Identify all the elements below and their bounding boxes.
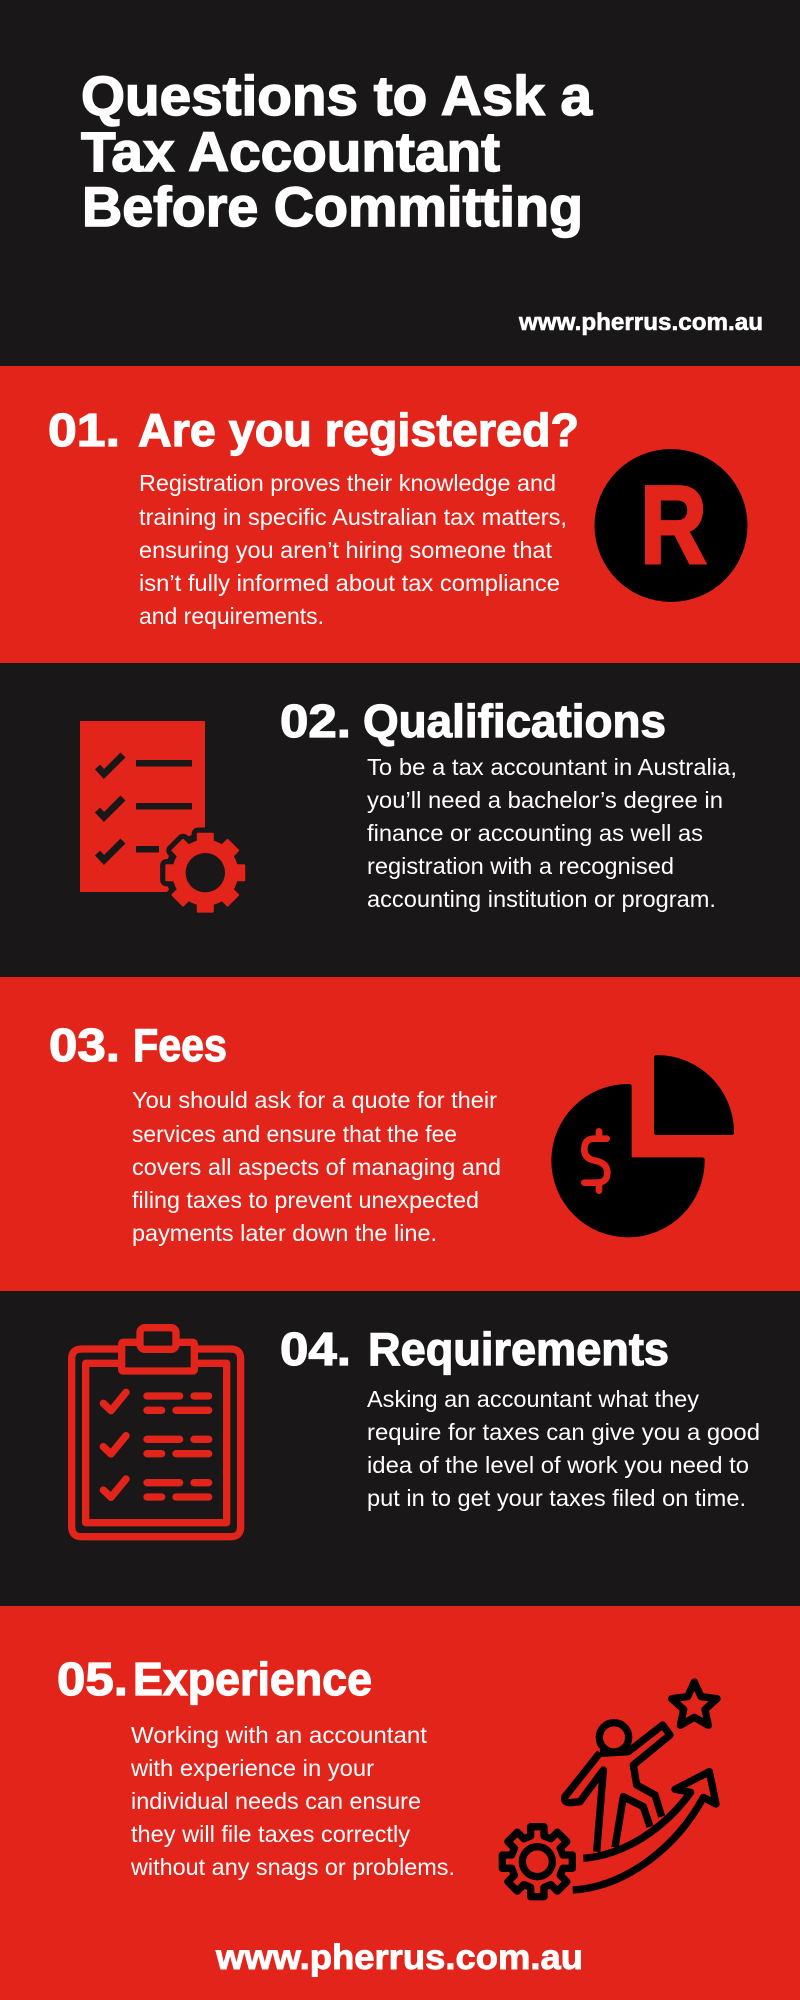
heading: 03: 03. [49,1019,120,1071]
heading: 04: 04. [280,1323,351,1375]
text block: 05 body: Working with an accountant [131,1722,428,1748]
text block: 05 body: they will file taxes correctly [131,1821,411,1847]
website link: footer: www.pherrus.com.au [215,1938,583,1977]
text block: 04 body: require for taxes can give you a good [367,1419,760,1445]
icon: person climbing arrow with gear and star [502,1682,717,1897]
heading: 03 [49,1019,227,1071]
text block: 01 body: isn’t fully informed about tax compliance [139,570,560,596]
panel: header background [0,0,800,366]
panel: 04 requirements [0,1291,800,1606]
text block: 03 body: filing taxes to prevent unexpected [132,1187,479,1213]
text block: 05 body [130,1722,455,1880]
text block: 03 body: payments later down the line. [132,1220,437,1246]
panel: 05 experience [0,1606,800,2000]
text block: 04 body: put in to get your taxes filed on time. [367,1485,746,1511]
icon: registered R circle: R [640,464,707,587]
text block: 01 body: Registration proves their knowledge and [139,470,556,496]
icon: clipboard checklist [72,1328,241,1537]
icon: registered R circle [594,449,748,602]
icon: checklist with gear [80,721,245,913]
text block: 03 body: services and ensure that the fee [132,1121,457,1147]
text block: 05 body: individual needs can ensure [131,1788,421,1814]
text block: 02 body: you’ll need a bachelor’s degree in [367,787,723,813]
text block: 02 body: finance or accounting as well as [367,820,703,846]
text block: 04 body [367,1386,760,1511]
text block: 02 body [367,754,737,912]
title: Tax Accountant [81,120,500,183]
heading: 05: Experience [133,1653,372,1705]
text block: 01 body: training in specific Australian tax matters, [139,504,567,530]
text block: 01 body: and requirements. [139,603,324,629]
panel: 02 qualifications [0,663,800,977]
heading: 01: 01. [48,404,120,456]
heading: 02: 02. [280,695,351,747]
icon: pie chart with dollar [551,1055,734,1237]
heading: 03: Fees [133,1019,227,1071]
text block: 02 body: To be a tax accountant in Australia, [367,754,737,780]
text block: 03 body: covers all aspects of managing and [132,1154,501,1180]
heading: 05: 05. [57,1653,128,1705]
website link: top: www.pherrus.com.au [518,309,763,336]
panel: 03 fees [0,977,800,1291]
title: Questions to Ask a [81,64,593,127]
text block: 05 body: without any snags or problems. [130,1854,455,1880]
text block: 04 body: idea of the level of work you need to [367,1452,749,1478]
heading: 04: Requirements [368,1323,669,1375]
text block: 02 body: registration with a recognised [367,853,674,879]
text block: 03 body [132,1087,501,1246]
heading: 01: Are you registered? [138,404,579,456]
text block: 01 body [139,470,567,629]
text block: 03 body: You should ask for a quote for their [132,1087,497,1113]
text block: 04 body: Asking an accountant what they [367,1386,700,1412]
heading: 02: Qualifications [363,695,666,747]
text block: 01 body: ensuring you aren’t hiring someone that [139,537,553,563]
panel: 01 are you registered [0,366,800,663]
title [81,64,593,238]
title: Before Committing [82,175,583,238]
text block: 05 body: with experience in your [130,1755,374,1781]
text block: 02 body: accounting institution or program. [367,886,716,912]
